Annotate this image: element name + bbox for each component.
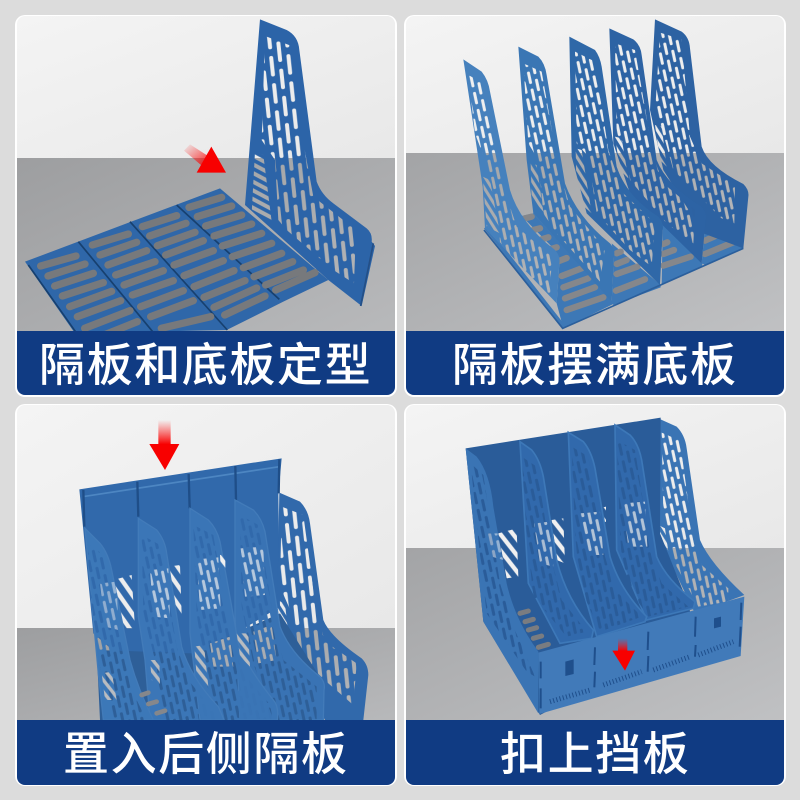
caption: 置入后侧隔板 [63, 728, 349, 780]
front plate [538, 597, 744, 714]
divider 5 [277, 493, 368, 720]
divider 3 [190, 508, 278, 720]
base plate strips [484, 208, 743, 328]
panel: step 3 insert rear partition [15, 404, 397, 786]
panel: step 2 dividers fill the base [404, 15, 786, 397]
divider 1 [463, 59, 560, 303]
panel: step 4 snap on front plate [404, 404, 786, 786]
divider 1 [85, 528, 153, 720]
base plate [25, 188, 328, 337]
red arrow [612, 638, 635, 671]
divider 2 [520, 442, 593, 643]
rear partition plate [79, 458, 282, 667]
snap window right [714, 617, 721, 628]
lower backing behind dividers [97, 613, 322, 720]
left side wall [466, 448, 538, 713]
divider panel standing upright [245, 19, 375, 306]
caption: 扣上挡板 [500, 728, 690, 780]
divider 3 [569, 37, 663, 285]
banner bar [17, 331, 395, 395]
banner bar [406, 720, 784, 785]
base slots at the bottom [142, 693, 165, 713]
red arrow [184, 144, 226, 173]
see-through hole clusters [487, 502, 647, 567]
divider 2 [518, 47, 614, 302]
divider 2 [138, 518, 224, 720]
banner bar [406, 331, 784, 395]
divider 4 [609, 28, 706, 263]
caption: 隔板摆满底板 [452, 339, 738, 391]
divider 4 [615, 425, 695, 620]
see-through hole clusters [100, 547, 277, 700]
right side divider [657, 418, 744, 613]
divider 3 [568, 432, 647, 637]
divider 4 [235, 500, 324, 720]
rear partition [466, 418, 697, 715]
red arrow [149, 420, 179, 470]
divider 5 [650, 19, 748, 248]
snap window left [565, 659, 574, 676]
banner bar [17, 720, 395, 785]
panel: step 1 dividers and base plate [15, 15, 397, 397]
caption: 隔板和底板定型 [39, 339, 372, 391]
